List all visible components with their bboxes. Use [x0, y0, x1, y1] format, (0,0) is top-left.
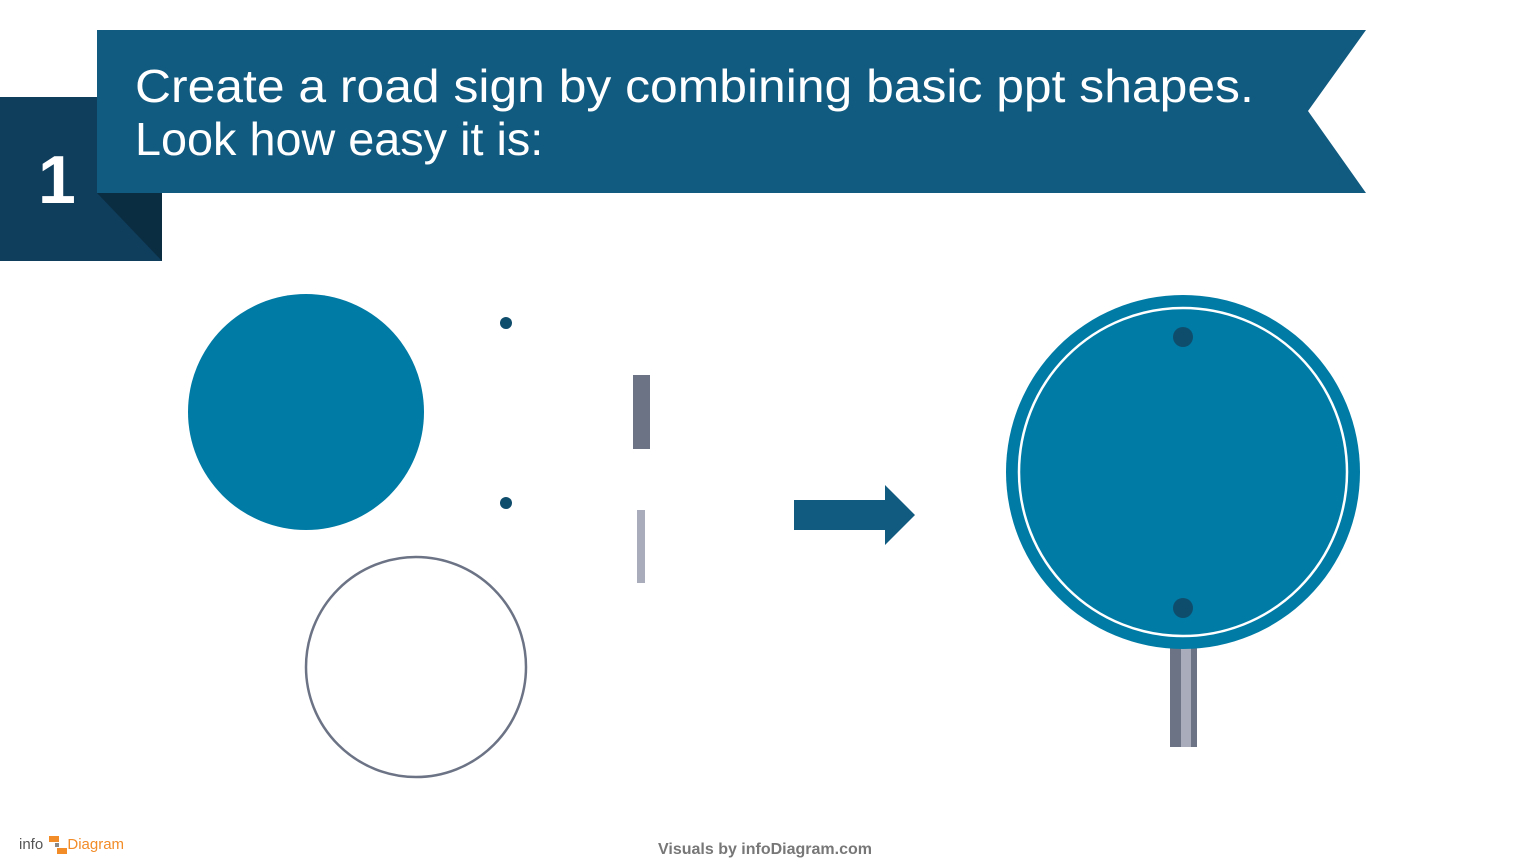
- banner ribbon: [97, 30, 1366, 193]
- title: Create a road sign by combining basic ppt shapes.: [135, 60, 1254, 112]
- road sign: [1006, 295, 1360, 747]
- title: Look how easy it is:: [135, 113, 543, 165]
- light bar: [637, 510, 645, 583]
- number box: [0, 97, 162, 261]
- title: [135, 60, 1254, 165]
- big filled circle: [188, 294, 424, 530]
- dark bar: [633, 375, 650, 449]
- small dots: [500, 317, 512, 509]
- outline circle: [306, 557, 526, 777]
- arrow: [794, 485, 915, 545]
- number: 1: [38, 142, 76, 218]
- logo: info Diagram: [19, 836, 124, 853]
- footer credit: Visuals by infoDiagram.com: [658, 841, 872, 858]
